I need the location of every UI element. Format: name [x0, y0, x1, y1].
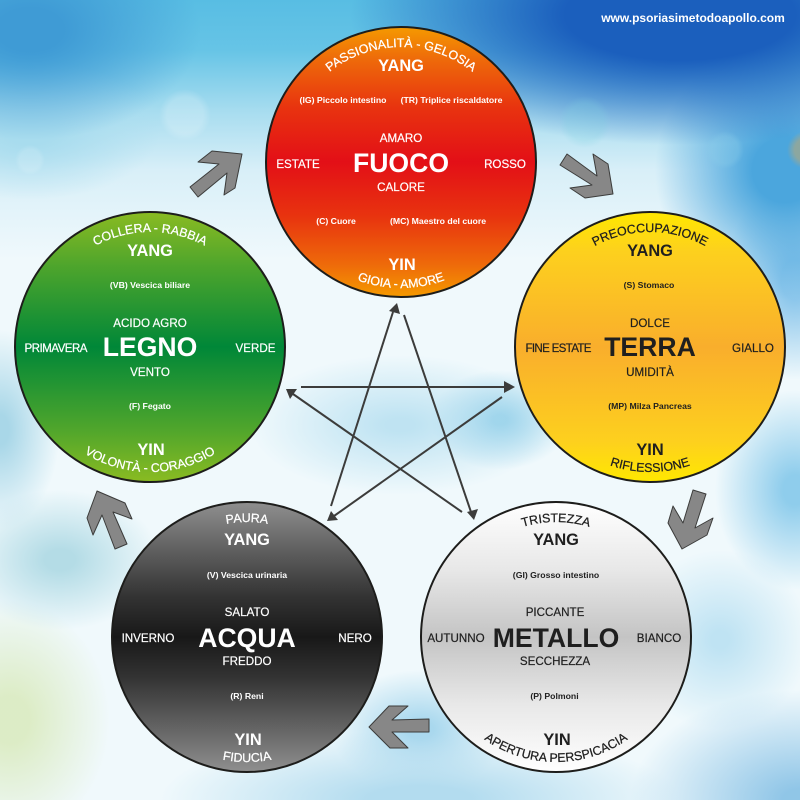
emotion yang: fuoco: PASSIONALITÀ - GELOSIA [325, 36, 475, 72]
flavour: PICCANTE [526, 606, 585, 619]
arrow: acqua to fuoco [331, 303, 400, 506]
arrow: legno to terra [301, 381, 515, 393]
organ: grosso intestino: (GI) Grosso intestino [513, 570, 599, 580]
yin label: YIN [137, 441, 165, 459]
yin label: YIN [543, 731, 571, 749]
colour: NERO [338, 632, 372, 645]
star of control arrows [286, 303, 515, 521]
circle: metallo [421, 502, 691, 772]
yin label: YIN [388, 256, 416, 274]
organ: fegato: (F) Fegato [129, 401, 171, 411]
panel: terra [514, 211, 786, 483]
climate: UMIDITÀ [626, 366, 674, 379]
season: ESTATE [276, 158, 320, 171]
arrow: metallo to acqua [369, 706, 429, 748]
colour: VERDE [236, 342, 276, 355]
emotion yin: FIDUCIA [223, 751, 272, 762]
flavour: SALATO [225, 606, 269, 619]
season: INVERNO [122, 632, 174, 645]
arrow: terra to metallo [668, 490, 713, 549]
organ: milza pancreas: (MP) Milza Pancreas [608, 401, 692, 411]
organ: triplice riscaldatore: (TR) Triplice riscaldatore [401, 95, 503, 105]
emotion yin: RIFLESSIONE [610, 457, 690, 472]
element name: FUOCO [353, 148, 449, 178]
panel: fuoco [265, 26, 537, 298]
emotion yin: APERTURA PERSPICACIA [484, 734, 628, 762]
organ: stomaco: (S) Stomaco [624, 280, 674, 290]
yang label: YANG [224, 531, 270, 549]
yang label: YANG [127, 242, 173, 260]
organ: vescica biliare: (VB) Vescica biliare [110, 280, 190, 290]
panel: legno [14, 211, 286, 483]
climate: VENTO [130, 366, 170, 379]
yang label: YANG [627, 242, 673, 260]
climate: CALORE [377, 181, 425, 194]
panel: acqua [111, 501, 383, 773]
season: PRIMAVERA [24, 342, 88, 355]
arrow: acqua to legno [87, 491, 132, 549]
organ: polmoni: (P) Polmoni [530, 691, 579, 701]
yang label: YANG [378, 57, 424, 75]
organ: piccolo intestino: (IG) Piccolo intestino [300, 95, 386, 105]
organ: cuore: (C) Cuore [316, 216, 356, 226]
emotion yang: COLLERA - RABBIA [93, 223, 206, 246]
season: AUTUNNO [427, 632, 485, 645]
emotion yin: GIOIA - AMORE [358, 272, 444, 288]
yin label: YIN [636, 441, 664, 459]
website url: www.psoriasimetodoapollo.com [600, 11, 785, 25]
organ: maestro del cuore: (MC) Maestro del cuore [390, 216, 486, 226]
emotion yang: PAURA [226, 513, 268, 524]
colour: ROSSO [484, 158, 526, 171]
element name: TERRA [604, 332, 696, 362]
circle: legno [15, 212, 285, 482]
climate: FREDDO [223, 655, 271, 668]
flavour: DOLCE [630, 317, 670, 330]
arrow: metallo to legno [286, 389, 462, 512]
yin label: YIN [234, 731, 262, 749]
circle: fuoco [266, 27, 536, 297]
circle: acqua [112, 502, 382, 772]
emotion yang: TRISTEZZA [520, 513, 590, 527]
element name: ACQUA [198, 623, 296, 653]
arrow: fuoco to terra [560, 154, 613, 198]
circle: terra [515, 212, 785, 482]
flavour: ACIDO AGRO [113, 317, 187, 330]
flavour: AMARO [380, 132, 422, 145]
colour: GIALLO [732, 342, 774, 355]
emotion yin: VOLONTÀ - CORAGGIO [87, 446, 214, 472]
element name: LEGNO [103, 332, 197, 362]
element name: METALLO [493, 623, 619, 653]
colour: BIANCO [637, 632, 681, 645]
arrow: terra to acqua [327, 397, 502, 521]
climate: SECCHEZZA [520, 655, 590, 668]
panel: metallo [420, 501, 692, 773]
organ: vescica urinaria: (V) Vescica urinaria [207, 570, 287, 580]
season: FINE ESTATE [526, 342, 592, 355]
arrow: fuoco to metallo [404, 315, 478, 520]
arrow: legno to fuoco [190, 151, 242, 197]
organ: reni: (R) Reni [230, 691, 264, 701]
yang label: YANG [533, 531, 579, 549]
emotion yang: PREOCCUPAZIONE [592, 223, 709, 246]
